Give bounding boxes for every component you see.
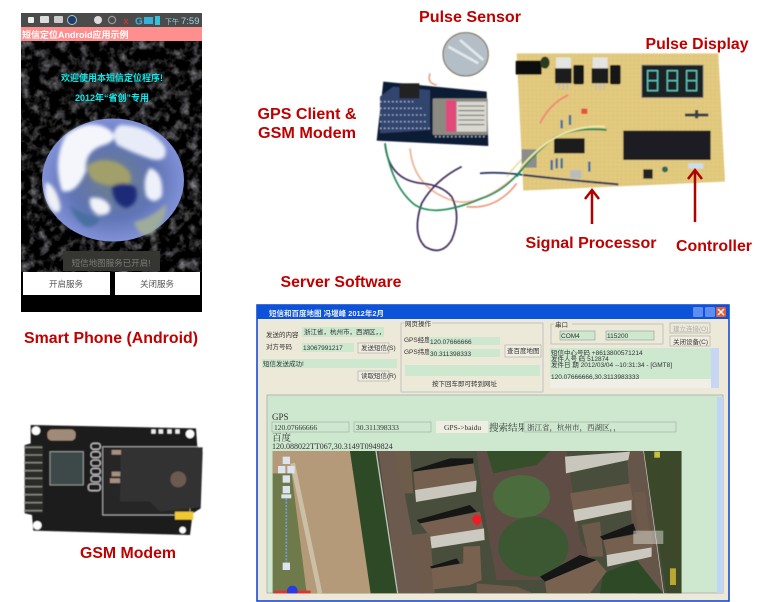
send form: 短信发送成功!	[263, 359, 304, 368]
serial port group: 建立连接(O)	[673, 324, 708, 333]
toast message: 短信地图服务已开启!	[72, 258, 150, 268]
baidu logo	[274, 591, 311, 594]
SMS log box	[550, 348, 719, 388]
label: smart phone: Smart Phone (Android)	[24, 330, 198, 347]
web operation group: 120.07666666	[430, 339, 472, 346]
SMS log box: 短信中心号码 +8613800571214	[551, 348, 643, 357]
icon: earth globe	[42, 118, 184, 242]
web operation group: GPS经度	[404, 335, 431, 344]
yellow map markers	[654, 452, 660, 458]
app title bar: 短信定位Android应用示例	[22, 29, 128, 40]
map results panel: GPS->baidu	[444, 423, 481, 432]
star background texture	[21, 41, 202, 272]
microcontroller chip	[623, 131, 711, 160]
serial port group: 115200	[607, 333, 629, 340]
GPS and GSM module board	[377, 82, 488, 146]
arrow: to controller	[688, 170, 702, 222]
icon: map pin	[472, 515, 482, 526]
SMS log box: 发件人号 码 512874	[551, 354, 609, 363]
panel: GSM modem photo	[24, 425, 203, 535]
trees	[350, 451, 398, 593]
map results panel: 百度	[272, 432, 292, 444]
button: start service: 开启服务	[49, 279, 83, 289]
panel: server software window	[257, 305, 729, 601]
serial port group: 关闭设备(C)	[673, 337, 708, 346]
building shadows	[413, 458, 637, 582]
send form: 对方号码	[266, 342, 292, 351]
status bar: 7:59	[181, 16, 200, 27]
status bar: G	[135, 16, 143, 28]
year text: 2012年“省创”专用	[75, 92, 149, 103]
label: GPS client and GSM modem: GPS Client &	[258, 106, 357, 123]
signal processor chip	[554, 138, 585, 153]
send form: 浙江省，杭州市，西湖区，，	[304, 327, 385, 336]
SMS log box: 120.07666666,30.3113983333	[551, 374, 639, 381]
button: stop service	[115, 272, 200, 295]
seven segment display	[642, 65, 703, 98]
wires	[385, 126, 618, 250]
window title bar	[257, 305, 729, 319]
status bar	[21, 13, 202, 28]
map results panel: 120.088022TT067,30.3149T0949824	[272, 442, 393, 451]
small components	[522, 95, 708, 179]
label: pulse display: Pulse Display	[646, 36, 749, 53]
label: GPS client and GSM modem	[258, 106, 357, 142]
panel: smart phone screenshot	[21, 13, 202, 312]
button: stop service: 关闭服务	[140, 279, 174, 289]
web operation group	[401, 319, 543, 392]
SMS log box: 发件日 期 2012/03/04 --10:31:34 - [GMT8]	[551, 360, 672, 369]
icon: pulse sensor disc	[429, 33, 488, 85]
button: start service	[23, 272, 110, 295]
window title bar: 短信和百度地图 冯堰峰 2012年2月	[269, 308, 384, 318]
label: server software: Server Software	[280, 274, 402, 291]
status bar: 下午	[165, 17, 179, 26]
serial port group: 串口	[555, 321, 568, 329]
wires over board	[517, 126, 618, 184]
map results panel: 浙江省，杭州市，西湖区，，	[527, 422, 621, 433]
label: signal processor: Signal Processor	[526, 235, 656, 252]
serial port group: COM4	[561, 333, 580, 340]
welcome text: 欢迎使用本短信定位程序!	[61, 72, 163, 83]
perfboard	[516, 53, 725, 191]
send form	[262, 327, 397, 381]
sand ground	[273, 451, 372, 593]
label: pulse sensor: Pulse Sensor	[419, 9, 521, 26]
send form: 发送的内容	[266, 330, 299, 339]
web operation group: 30.311398333	[430, 351, 471, 358]
voltage regulators	[555, 57, 621, 90]
buildings	[393, 451, 653, 593]
map results panel: GPS	[272, 412, 289, 422]
panel: hardware photo	[377, 33, 725, 250]
send form: 读取短信(R)	[361, 371, 396, 380]
map results panel: 30.311398333	[356, 423, 399, 432]
serial port group	[551, 321, 710, 346]
label: controller: Controller	[676, 238, 752, 255]
power jack	[516, 61, 542, 75]
send form: 13067991217	[303, 345, 343, 352]
map results panel: 120.07666666	[274, 423, 317, 432]
web operation group: 按下回车即可转到网址	[432, 379, 498, 388]
web operation group: GPS纬度	[404, 347, 431, 356]
map results panel	[267, 395, 723, 593]
web operation group: 查百度地图	[507, 346, 540, 355]
satellite map	[273, 451, 682, 596]
app title bar	[21, 27, 202, 41]
map zoom control	[274, 457, 311, 596]
map results panel: 搜索结果	[489, 422, 528, 434]
web operation group: 网页操作	[405, 319, 432, 328]
label: GSM modem: GSM Modem	[80, 545, 176, 562]
send form: 发送短信(S)	[361, 343, 396, 352]
label: GPS client and GSM modem: GSM Modem	[258, 125, 356, 142]
toast message	[63, 251, 160, 271]
arrow: to signal processor	[585, 190, 599, 224]
